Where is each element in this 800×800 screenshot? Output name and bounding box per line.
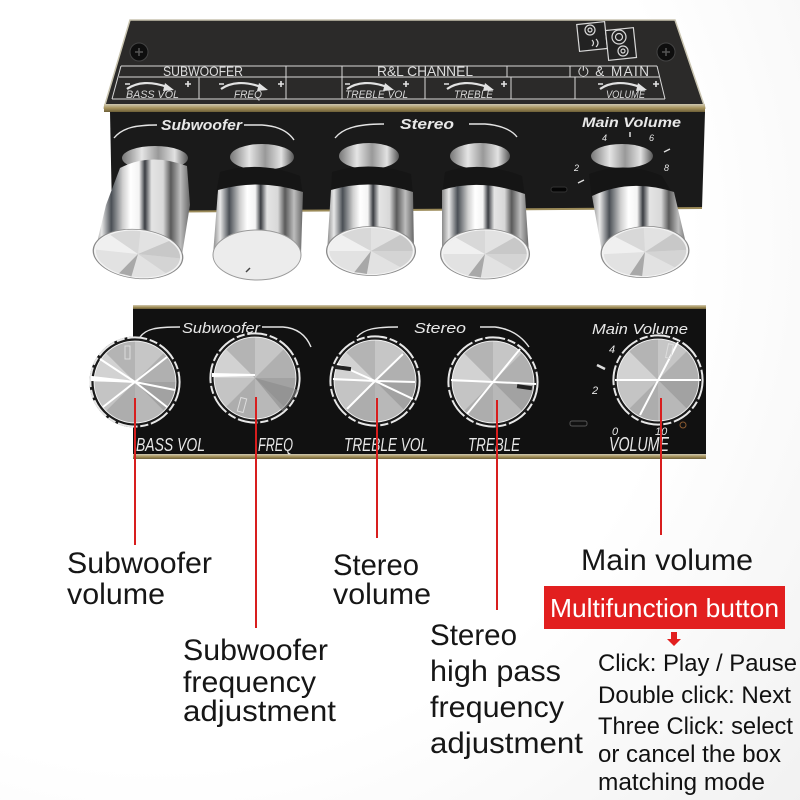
knob: volume	[612, 334, 704, 426]
label table: VOLUME	[606, 89, 646, 101]
label: stereo high pass frequency adjustment: high pass	[430, 655, 561, 688]
label: subwoofer frequency adjustment: frequency	[183, 666, 316, 699]
icon: red down arrow	[667, 632, 681, 646]
knob: subwoofer frequency	[213, 144, 303, 280]
panel markings: 0	[612, 426, 619, 438]
leader line: main volume	[660, 398, 662, 535]
panel markings: TREBLE	[468, 435, 521, 455]
panel markings: 2	[573, 163, 579, 173]
text block: button functions: Click: Play / Pause	[598, 650, 797, 677]
text block: button functions: Three Click: select	[598, 713, 793, 740]
panel markings: Subwoofer	[161, 117, 243, 134]
leader line: stereo volume	[376, 398, 378, 538]
panel markings: VOLUME	[609, 434, 669, 456]
label: subwoofer volume: volume	[67, 578, 165, 611]
panel markings: Stereo	[414, 320, 466, 337]
panel markings: 6	[649, 133, 654, 143]
panel markings: 4	[609, 344, 615, 356]
panel markings	[114, 114, 681, 192]
screw left	[130, 43, 148, 61]
label: subwoofer frequency adjustment: Subwoofer	[183, 634, 328, 667]
panel markings: FREQ	[258, 435, 293, 455]
label table: BASS VOL	[126, 89, 179, 101]
panel markings: 8	[664, 163, 669, 173]
label: subwoofer frequency adjustment: adjustment	[183, 695, 337, 728]
panel markings: Main Volume	[582, 114, 681, 130]
photo: front view of device	[90, 305, 706, 459]
label: stereo high pass frequency adjustment: Stereo	[430, 619, 517, 652]
knob: main volume	[589, 144, 690, 280]
text block: button functions: matching mode	[598, 769, 765, 796]
panel markings: TREBLE VOL	[344, 435, 428, 455]
label: main volume: Main volume	[581, 544, 753, 577]
text block: button functions: Double click: Next	[598, 682, 791, 709]
panel markings: 2	[591, 385, 598, 397]
knob: subwoofer volume	[91, 146, 190, 283]
knob: stereo high pass frequency	[441, 143, 529, 279]
knob: treble vol	[330, 336, 420, 426]
leader line: stereo high pass	[496, 400, 498, 610]
callout: multifunction button	[544, 586, 785, 629]
callout: multifunction button: Multifunction button	[550, 593, 779, 623]
panel markings: 10	[655, 426, 668, 438]
panel markings	[136, 320, 688, 456]
label table: TREBLE	[454, 89, 494, 101]
label table: ⏻ & MAIN	[578, 64, 649, 79]
gold board edge	[104, 104, 705, 112]
label: stereo high pass frequency adjustment: frequency	[430, 691, 564, 724]
panel markings: Main Volume	[592, 321, 688, 338]
label table	[112, 64, 665, 101]
label: stereo volume: Stereo	[333, 549, 419, 582]
label table: FREQ	[234, 89, 262, 101]
knob: bass vol	[90, 336, 180, 428]
gold bottom edge	[133, 454, 706, 459]
leader line: subwoofer frequency	[255, 397, 257, 628]
icon: speakers	[577, 22, 636, 60]
knob: stereo volume	[327, 143, 415, 275]
knob: treble	[448, 336, 538, 428]
label: stereo volume	[333, 549, 431, 611]
panel board	[133, 306, 706, 458]
label table: R&L CHANNEL	[377, 64, 473, 79]
label table: SUBWOOFER	[163, 64, 243, 79]
label: subwoofer volume: Subwoofer	[67, 547, 212, 580]
label: subwoofer frequency adjustment	[183, 634, 337, 728]
label table: TREBLE VOL	[345, 89, 408, 101]
leader line: subwoofer volume	[134, 398, 136, 545]
label: stereo high pass frequency adjustment: adjustment	[430, 727, 584, 760]
gold top edge	[133, 305, 706, 309]
screw right	[657, 43, 675, 61]
photo: angled device with extended knobs	[91, 20, 705, 283]
label: subwoofer volume	[67, 547, 212, 611]
panel markings: Subwoofer	[182, 320, 261, 337]
panel markings: 4	[602, 133, 607, 143]
panel markings: Stereo	[400, 116, 454, 133]
label: stereo high pass frequency adjustment	[430, 619, 584, 760]
knob: freq	[210, 332, 300, 424]
device front face	[110, 112, 705, 212]
panel markings: BASS VOL	[136, 435, 205, 455]
text block: button functions: or cancel the box	[598, 741, 781, 768]
text block: button functions	[598, 650, 797, 796]
device top plate	[104, 20, 705, 108]
label: stereo volume: volume	[333, 578, 431, 611]
bottom gold edge	[112, 207, 702, 213]
